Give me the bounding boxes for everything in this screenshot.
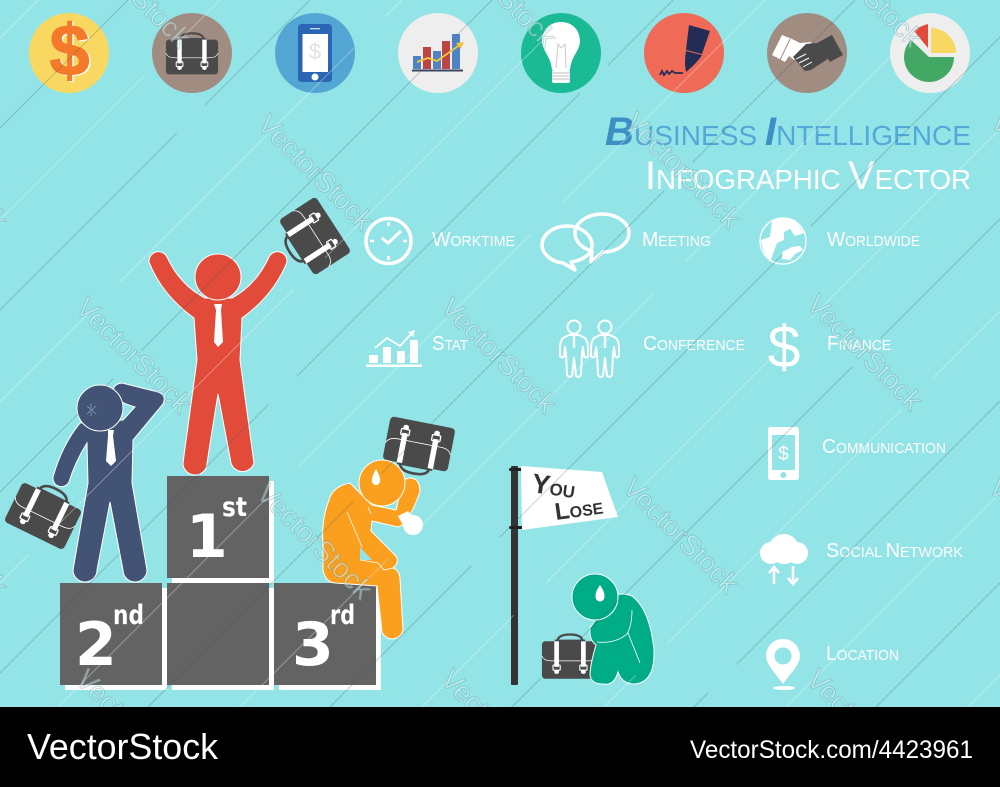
podium box: 3rd: 3 bbox=[292, 610, 334, 680]
podium box: 3rd bbox=[274, 583, 376, 685]
watermarks: VectorStock bbox=[801, 288, 929, 417]
icon: handshake bbox=[767, 13, 847, 93]
legend: worldwide: WORLDWIDE bbox=[827, 229, 920, 251]
podium box: 1st bbox=[167, 476, 269, 578]
legend: finance bbox=[768, 314, 891, 380]
icon: light bulb bbox=[521, 13, 601, 93]
icon: fountain pen bbox=[644, 13, 724, 93]
heading: Infographic Vector: INFOGRAPHIC VECTOR bbox=[645, 154, 971, 198]
watermarks: VectorStock bbox=[435, 291, 563, 420]
legend grid bbox=[366, 214, 963, 690]
icon: briefcase bbox=[152, 13, 232, 93]
icon: bar chart bbox=[398, 13, 478, 93]
legend: worldwide bbox=[760, 218, 920, 264]
footer image id: VectorStock.com/4423961 bbox=[690, 736, 973, 764]
legend: communication bbox=[768, 427, 946, 480]
title bbox=[605, 110, 971, 198]
footer bar bbox=[0, 707, 1000, 787]
podium box: 1st: st bbox=[222, 492, 247, 523]
figure: red winner bbox=[149, 196, 351, 475]
podium box: 2nd: nd bbox=[113, 600, 144, 631]
legend: social network: SOCIAL NETWORK bbox=[826, 540, 963, 562]
podium bbox=[60, 476, 381, 690]
icon: dollar coin: $ bbox=[51, 12, 91, 92]
flag: You Lose bbox=[509, 466, 618, 685]
legend: location bbox=[766, 639, 899, 690]
legend: finance: FINANCE bbox=[827, 333, 891, 355]
icon: pie chart bbox=[890, 13, 970, 93]
legend: worktime: WORKTIME bbox=[432, 229, 515, 251]
legend: stat: STAT bbox=[432, 333, 468, 355]
podium box: 3rd: rd bbox=[330, 600, 355, 631]
legend: conference: CONFERENCE bbox=[643, 333, 745, 355]
legend: worktime bbox=[366, 218, 515, 264]
legend: stat bbox=[366, 330, 468, 367]
flag: You Lose: LOSE bbox=[553, 492, 605, 526]
legend: meeting bbox=[542, 214, 711, 270]
podium box: 2nd bbox=[60, 583, 162, 685]
figure: green loser bbox=[542, 574, 654, 684]
legend: communication: COMMUNICATION bbox=[822, 436, 946, 458]
legend: communication: $ bbox=[778, 444, 789, 465]
watermarks: VectorStock bbox=[617, 471, 745, 600]
icon: smartphone bbox=[275, 13, 355, 93]
podium box: 2nd: 2 bbox=[75, 610, 117, 680]
figure: orange third place bbox=[323, 416, 456, 639]
legend: meeting: MEETING bbox=[642, 229, 711, 251]
flag: You Lose: YOU bbox=[530, 468, 577, 504]
watermarks: VectorStock bbox=[70, 291, 198, 420]
icon: dollar coin: $ bbox=[49, 11, 90, 91]
legend: conference bbox=[560, 320, 745, 377]
watermarks: VectorStock bbox=[619, 106, 747, 235]
podium box: 1st: 1 bbox=[186, 502, 228, 572]
figure: blue runner-up bbox=[4, 383, 164, 582]
footer brand: VectorStock bbox=[27, 726, 219, 767]
watermarks: VectorStock bbox=[252, 108, 380, 237]
icon row bbox=[29, 11, 970, 93]
legend: social network bbox=[760, 534, 963, 584]
legend: location: LOCATION bbox=[826, 643, 899, 665]
legend: finance: $ bbox=[768, 314, 800, 380]
watermarks: VectorStock bbox=[251, 477, 379, 606]
heading: Business Intelligence: BUSINESS INTELLIGENCE bbox=[605, 110, 971, 154]
icon: dollar coin bbox=[29, 11, 109, 93]
icon: smartphone: $ bbox=[309, 39, 321, 64]
